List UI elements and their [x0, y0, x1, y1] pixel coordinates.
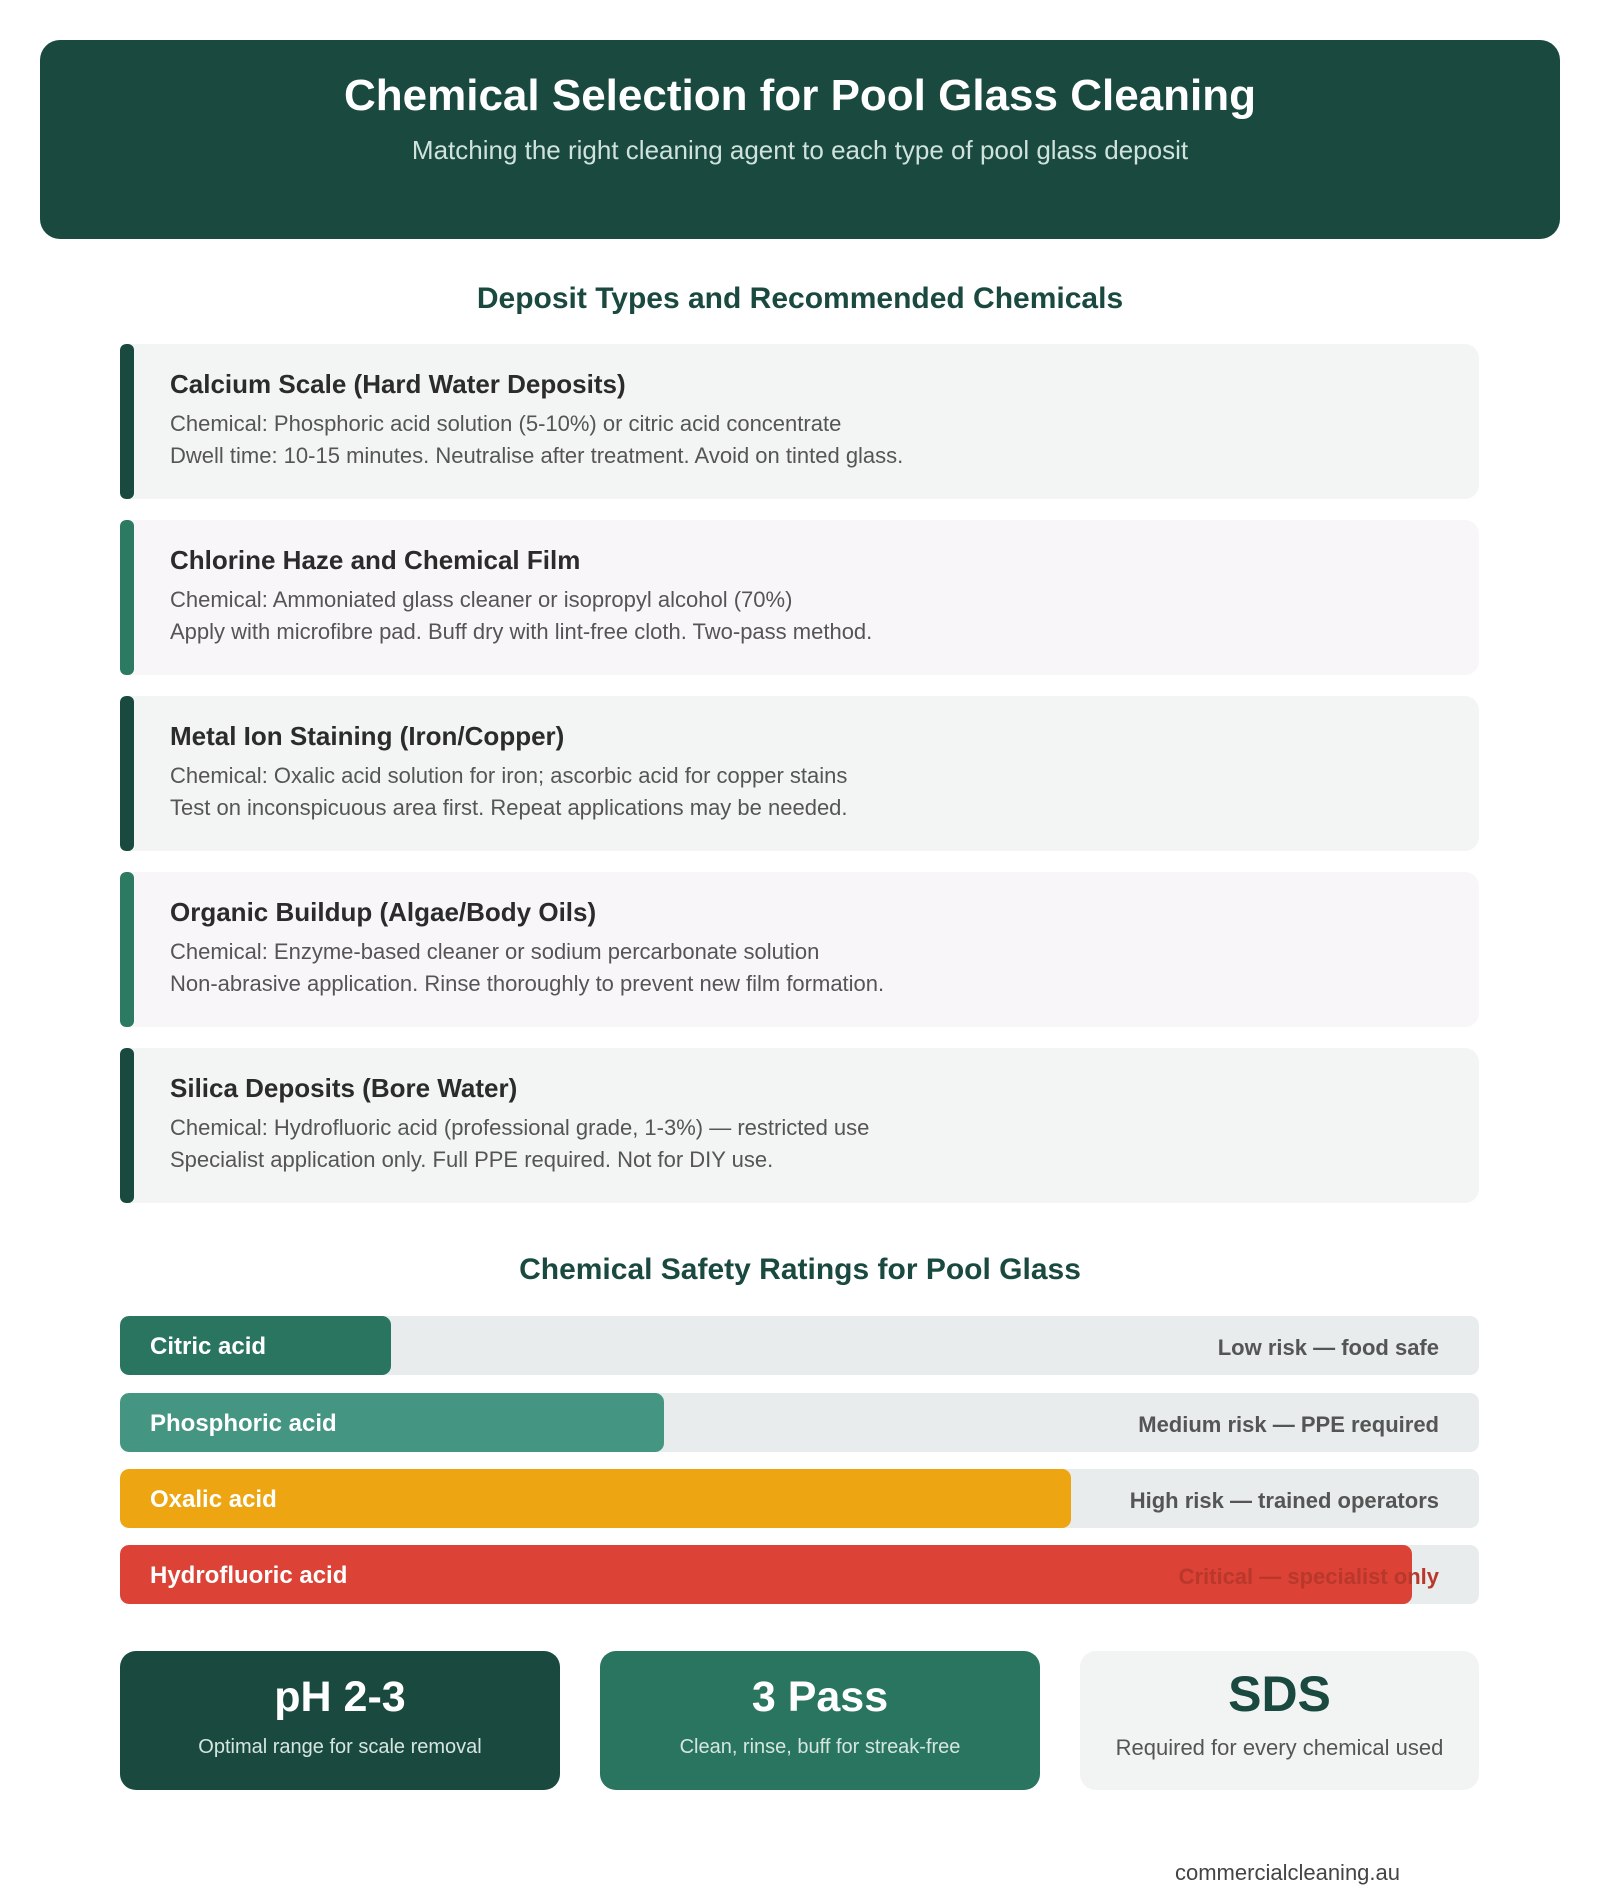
stat: SDS: Required for every chemical used: [1116, 1735, 1443, 1760]
card: metal ion staining: Chemical: Oxalic acid solution for iron; ascorbic acid for copper stains: [170, 763, 847, 788]
subtitle: Matching the right cleaning agent to each type of pool glass deposit: [412, 135, 1188, 165]
stat: 3 pass: 3 Pass: [752, 1673, 888, 1721]
card: organic buildup: Chemical: Enzyme-based cleaner or sodium percarbonate solution: [170, 939, 819, 964]
card: chlorine haze: [120, 520, 1479, 675]
footer: commercialcleaning.au: [1175, 1860, 1400, 1885]
card: silica deposits: Chemical: Hydrofluoric acid (professional grade, 1-3%) — restricted use: [170, 1115, 869, 1140]
stat: SDS: SDS: [1228, 1666, 1331, 1722]
stat: 3 pass: [600, 1651, 1040, 1790]
bar: hydrofluoric acid: Hydrofluoric acid: [150, 1562, 347, 1589]
stat: pH: [120, 1651, 560, 1790]
card: silica deposits: Silica Deposits (Bore Water): [170, 1073, 517, 1103]
card: metal ion staining: [120, 696, 1479, 851]
card: organic buildup: Organic Buildup (Algae/Body Oils): [170, 897, 596, 927]
bar: hydrofluoric acid: [120, 1545, 1479, 1604]
card: calcium scale: [120, 344, 1479, 499]
bar: oxalic acid: High risk — trained operators: [1130, 1488, 1439, 1513]
stat: SDS: [1080, 1651, 1479, 1790]
card: silica deposits: [120, 1048, 1479, 1203]
title: Chemical Selection for Pool Glass Cleaning: [344, 71, 1256, 120]
card: chlorine haze: Chlorine Haze and Chemical Film: [170, 545, 580, 575]
stat: 3 pass: Clean, rinse, buff for streak-free: [680, 1736, 960, 1758]
header banner: [40, 40, 1560, 239]
card: calcium scale: Calcium Scale (Hard Water Deposits): [170, 369, 626, 399]
bar: phosphoric acid: Medium risk — PPE required: [1138, 1412, 1439, 1437]
card: chlorine haze: Apply with microfibre pad. Buff dry with lint-free cloth. Two-pass method.: [170, 619, 872, 644]
bar: oxalic acid: Oxalic acid: [150, 1486, 277, 1513]
card: calcium scale: Chemical: Phosphoric acid solution (5-10%) or citric acid concentrate: [170, 411, 841, 436]
section heading: deposit types: Deposit Types and Recommended Chemicals: [477, 282, 1123, 315]
card: organic buildup: [120, 872, 1479, 1027]
section heading: safety ratings: Chemical Safety Ratings for Pool Glass: [519, 1253, 1081, 1286]
card: chlorine haze: Chemical: Ammoniated glass cleaner or isopropyl alcohol (70%): [170, 587, 792, 612]
card: organic buildup: Non-abrasive application. Rinse thoroughly to prevent new film formation.: [170, 971, 884, 996]
bar: citric acid: [120, 1316, 1479, 1375]
bar: citric acid: Low risk — food safe: [1218, 1335, 1439, 1360]
bar: phosphoric acid: [120, 1393, 1479, 1452]
bar: hydrofluoric acid: Critical — specialist only: [1179, 1564, 1439, 1589]
stat: pH: pH 2-3: [274, 1673, 406, 1721]
card: silica deposits: Specialist application only. Full PPE required. Not for DIY use.: [170, 1147, 773, 1172]
card: calcium scale: Dwell time: 10-15 minutes. Neutralise after treatment. Avoid on tinted glass.: [170, 443, 903, 468]
card: metal ion staining: Metal Ion Staining (Iron/Copper): [170, 721, 564, 751]
bar: citric acid: Citric acid: [150, 1333, 266, 1360]
bar: phosphoric acid: Phosphoric acid: [150, 1410, 337, 1437]
bar: oxalic acid: [120, 1469, 1479, 1528]
card: metal ion staining: Test on inconspicuous area first. Repeat applications may be needed.: [170, 795, 848, 820]
stat: pH: Optimal range for scale removal: [198, 1736, 482, 1758]
